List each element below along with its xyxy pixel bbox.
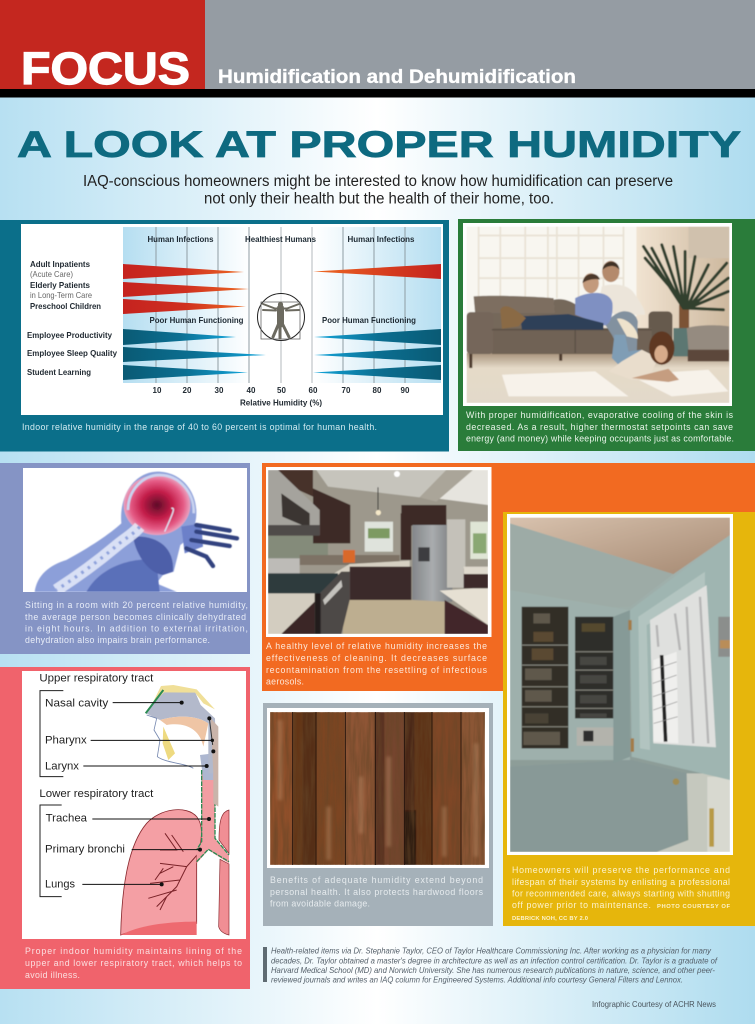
row labels: Preschool Children	[30, 302, 101, 311]
caption: personal health. It also protects hardwood floors	[270, 887, 484, 897]
panel: respiratory tract	[0, 667, 250, 989]
source note: reviewed journals and writes an IAQ column for Engineered Systems. Additional info courtesy General Filters and Lennox.	[271, 974, 683, 984]
x axis ticks: 30	[215, 386, 224, 395]
anatomy labels: Trachea	[46, 813, 88, 825]
photo: kitchen	[268, 470, 488, 634]
left lung	[121, 810, 201, 935]
x axis ticks: 50	[277, 386, 286, 395]
credit line: Infographic Courtesy of ACHR News	[592, 999, 716, 1009]
plant	[679, 305, 689, 330]
row labels: Student Learning	[27, 368, 91, 377]
diagram: respiratory tract	[39, 673, 229, 935]
anatomy labels	[39, 673, 154, 890]
row labels	[27, 260, 117, 377]
head section	[146, 689, 217, 773]
x axis ticks: 80	[373, 386, 382, 395]
photo: breaker box	[510, 518, 730, 852]
row labels: in Long-Term Care	[30, 291, 92, 300]
caption	[266, 641, 488, 686]
caption	[25, 946, 242, 980]
caption: from avoidable damage.	[270, 898, 370, 908]
panel: family photo	[458, 219, 755, 451]
caption: A healthy level of relative humidity increases the	[266, 641, 487, 651]
anatomy labels: Larynx	[45, 760, 79, 772]
right lung	[219, 810, 229, 935]
x axis ticks: 20	[183, 386, 192, 395]
caption: decreased. As a result, higher thermostat setpoints can save	[466, 422, 733, 432]
row labels: Adult Inpatients	[30, 260, 90, 269]
caption: PHOTO COURTESY OF	[657, 904, 730, 910]
chart column headings	[148, 235, 416, 325]
source note: decades, Dr. Taylor obtained a master's degree in architecture as well as an infection control certification. Dr. Taylor is a graduate of	[271, 956, 719, 966]
caption: Homeowners will preserve the performance and	[512, 865, 730, 875]
infection risk wedges	[123, 264, 441, 314]
caption	[466, 410, 734, 444]
caption: the average person becomes clinically dehydrated	[25, 612, 246, 622]
caption	[25, 600, 248, 645]
photo: family on sofa	[466, 226, 730, 403]
caption: With proper humidification, evaporative cooling of the skin is	[466, 410, 734, 420]
caption: for recommended care, always starting with shutting	[512, 888, 730, 898]
icon: Vitruvian man	[258, 294, 304, 340]
hand	[181, 523, 203, 553]
chart column headings: Poor Human Functioning	[322, 316, 416, 325]
row labels: Employee Sleep Quality	[27, 349, 117, 358]
caption: Benefits of adequate humidity extend beyond	[270, 875, 483, 885]
x axis ticks: 70	[342, 386, 351, 395]
caption: energy (and money) while keeping occupants just as comfortable.	[466, 434, 734, 444]
intro text: not only their health but the health of their home, too.	[204, 190, 554, 208]
caption: effectiveness of cleaning. It decreases surface	[266, 653, 487, 663]
caption: in eight hours. In addition to external irritation,	[25, 624, 248, 634]
photo: translucent human head with brain	[34, 471, 240, 592]
x axis ticks: 60	[309, 386, 318, 395]
panel: humidity chart	[0, 220, 449, 452]
caption: dehydration also impairs brain performance.	[25, 635, 210, 645]
chart column headings: Poor Human Functioning	[150, 316, 244, 325]
section label: FOCUS: FOCUS	[21, 43, 190, 94]
section subtitle: Humidification and Dehumidification	[218, 67, 576, 88]
chart plot background	[123, 227, 441, 383]
header band	[0, 0, 755, 98]
caption: lifespan of their systems by enlisting a professional	[512, 877, 730, 887]
caption: avoid illness.	[25, 970, 80, 980]
row labels: Employee Productivity	[27, 331, 112, 340]
source note: Harvard Medical School (MD) and Norwich University. She has numerous research publications in nature, science, and other peer-	[271, 965, 715, 975]
x axis ticks: 10	[153, 386, 162, 395]
anatomy labels: Upper respiratory tract	[39, 673, 154, 685]
caption: aerosols.	[266, 676, 304, 686]
man	[598, 285, 645, 315]
intro text	[83, 173, 673, 208]
ottoman	[687, 325, 729, 355]
row labels: Elderly Patients	[30, 281, 90, 290]
child	[612, 335, 642, 365]
panel: electrical panel	[503, 512, 755, 926]
x axis title: Relative Humidity (%)	[240, 398, 322, 408]
woman	[575, 293, 613, 325]
brackets	[40, 691, 63, 897]
anatomy labels: Primary bronchi	[45, 844, 125, 856]
open door	[613, 610, 630, 763]
source note	[263, 946, 719, 984]
bronchial tree	[148, 833, 200, 910]
caption: recontamination from the resettling of infectious	[266, 665, 488, 675]
chart column headings: Human Infections	[348, 235, 415, 244]
caption: DEBRICK NOH, CC BY 2.0	[512, 916, 588, 922]
intro text: IAQ-conscious homeowners might be interested to know how humidification can preserve	[83, 173, 673, 190]
caption: Indoor relative humidity in the range of 40 to 60 percent is optimal for human health.	[22, 422, 377, 432]
chart column headings: Healthiest Humans	[245, 235, 316, 244]
caption	[512, 865, 730, 922]
trachea and bronchi	[197, 770, 229, 863]
x axis ticks	[153, 386, 410, 395]
x axis ticks: 90	[401, 386, 410, 395]
breakers	[522, 607, 568, 748]
pointer lines	[82, 703, 212, 884]
caption: Proper indoor humidity maintains lining of the	[25, 946, 242, 956]
photo: wood planks	[270, 712, 485, 865]
panel: dehydration	[0, 463, 250, 654]
source note: Health-related items via Dr. Stephanie Taylor, CEO of Taylor Healthcare Commissioning Inc. After working as a physician for many	[271, 946, 712, 956]
chart column headings: Human Infections	[148, 235, 214, 244]
title: A LOOK AT PROPER HUMIDITY	[17, 124, 741, 165]
row labels: (Acute Care)	[30, 270, 73, 279]
caption: upper and lower respiratory tract, which helps to	[25, 958, 242, 968]
anatomy labels: Nasal cavity	[45, 698, 109, 710]
caption: Sitting in a room with 20 percent relative humidity,	[25, 600, 248, 610]
caption	[270, 875, 484, 908]
x axis ticks: 40	[247, 386, 256, 395]
anatomy labels: Lower respiratory tract	[39, 788, 154, 800]
anatomy labels: Lungs	[45, 878, 75, 890]
caption: off power prior to maintenance.	[512, 900, 651, 910]
panel: clean kitchen	[262, 463, 755, 691]
functioning wedges	[123, 329, 441, 380]
anatomy labels: Pharynx	[45, 734, 87, 746]
panel: hardwood floor	[263, 703, 493, 926]
